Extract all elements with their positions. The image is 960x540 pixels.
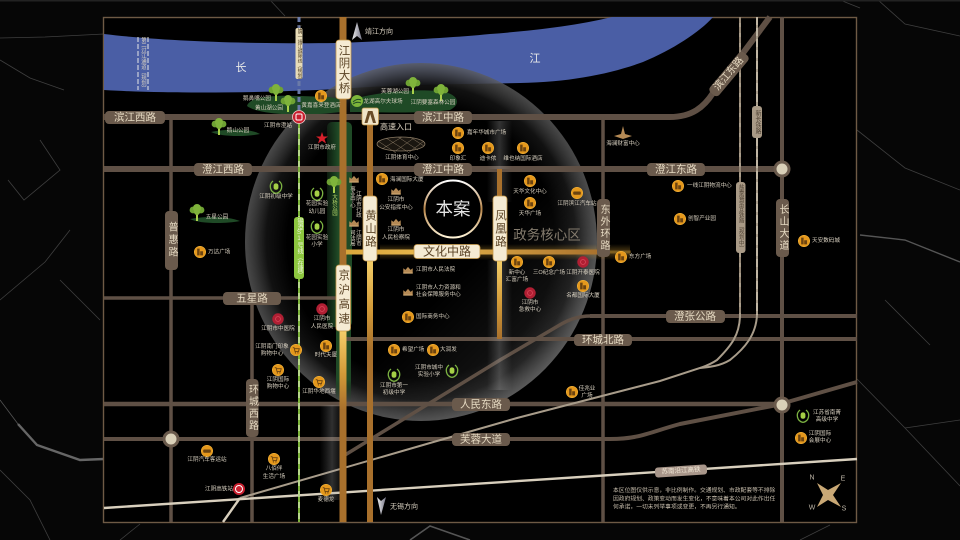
road label: 芙蓉大道	[452, 432, 510, 446]
compass: S	[842, 506, 847, 512]
park: 芙蓉湖公园	[381, 77, 420, 95]
gov: 江阴市行政事业中心: 事业中心	[349, 185, 356, 208]
school: 花园实验幼儿园: 花园实验	[306, 199, 329, 207]
gov: 江阴市人民检察院: 江阴市	[388, 225, 405, 233]
gov: 江阴市行政事业中心	[349, 176, 362, 219]
road label: 人民东路	[452, 398, 510, 411]
district label: 政务核心区	[513, 228, 581, 242]
mall: 江阴国际购物中心: 购物中心	[267, 382, 290, 390]
POI: 天安数码城	[798, 235, 840, 247]
riverside green belts	[190, 90, 457, 223]
POI: 迪卡侬	[480, 142, 497, 162]
POI: 嘉年华城市广场	[452, 127, 507, 139]
POI: 名都国际大厦	[566, 280, 600, 299]
road label: 环城西路: 环城西路	[246, 384, 258, 432]
POI: 江阴滨江汽车站: 江阴滨江汽车站	[557, 199, 597, 207]
POI: 佳兆业广场	[566, 384, 596, 399]
road label: 环城北路	[574, 333, 632, 346]
POI: 海澜国际大厦: 海澜国际大厦	[390, 175, 424, 183]
project marker: 本案: 本案	[436, 199, 470, 219]
road label: 普惠路	[165, 211, 178, 270]
hospital: 江阴市人民医院: 人民医院	[311, 322, 334, 330]
school: 江阴市第一初级中学	[380, 369, 408, 396]
highlighted label: 黄山路: 黄山路	[364, 209, 377, 248]
POI: 创智产业园	[674, 213, 716, 225]
hospital: 江阴市急救中心	[519, 287, 542, 313]
park: 鹅山公园: 鹅山公园	[227, 126, 250, 134]
POI: 三O纪念广场: 三O纪念广场	[533, 268, 566, 276]
school: 江阴市第一初级中学: 江阴市第一	[380, 381, 408, 389]
metro line S1	[294, 17, 304, 522]
direction arrow: 靖江方向	[352, 22, 393, 40]
POI: 万达广场: 万达广场	[208, 248, 231, 256]
school: 江阴市城中实验小学: 实验小学	[418, 370, 441, 378]
park: 鹅鼻嘴公园: 鹅鼻嘴公园	[243, 94, 271, 102]
highlighted label: 京沪高速: 京沪高速	[337, 268, 350, 327]
gov: 江阴市行政事业中心: 江阴市行政	[355, 190, 362, 219]
POI: 江阴汽车客运站: 江阴汽车客运站	[187, 455, 227, 463]
park: 江阴要塞森林公园: 江阴要塞森林公园	[411, 98, 456, 106]
compass: W	[809, 504, 816, 512]
POI: 维也纳国际酒店	[503, 142, 543, 162]
light glows along roads	[320, 121, 630, 500]
POI: 新中心汇富广场: 新中心	[509, 268, 526, 276]
road network	[104, 17, 857, 522]
school: 江阴市第一初级中学: 初级中学	[383, 388, 406, 396]
POI: 佳兆业广场: 广场	[581, 391, 593, 399]
highlighted label: 江阴大桥	[336, 40, 351, 99]
POI: 万达广场	[194, 246, 231, 258]
rail label: 盐泰锡常宜铁路: 盐泰锡常宜铁路（规划中）	[738, 183, 744, 251]
metro line S1: 锡澄S1号线（在建）	[296, 217, 303, 278]
POI: 印象汇: 印象汇	[450, 154, 467, 162]
disclaimer note: 因政府规划、政策变动而发生变化，不意味着本公司对此作出任	[613, 494, 776, 502]
highlighted label: 文化中路	[414, 244, 480, 258]
mall: 江阴南门印象购物中心: 江阴南门印象	[255, 342, 289, 350]
school: 江阴初级中学	[259, 181, 293, 200]
station: 江阴高铁站: 江阴高铁站	[205, 484, 233, 492]
hospital: 江阴市人民医院: 江阴市	[314, 314, 331, 322]
mall: 八佰伴生活广场	[263, 453, 286, 480]
highlighted label: 江阴大桥: 江阴大桥	[338, 44, 350, 94]
POI: 天华文化中心: 天华文化中心	[513, 187, 547, 195]
gov: 江阴市司法局	[349, 220, 362, 247]
school: 江苏省南菁高级中学	[797, 408, 841, 423]
POI: 三O纪念广场	[533, 256, 566, 276]
POI: 大润发: 大润发	[440, 345, 457, 353]
hospital: 江阴市急救中心: 急救中心	[519, 305, 542, 313]
second river crossing (planned): 第二过江通道（规划）	[140, 36, 147, 91]
direction arrow: 无锡方向	[377, 497, 418, 515]
direction arrow: 无锡方向: 无锡方向	[390, 502, 418, 510]
highlighted label: 文化中路: 文化中路	[423, 244, 471, 258]
railway lines	[104, 17, 857, 522]
school: 江阴初级中学: 江阴初级中学	[259, 192, 293, 200]
POI: 印象汇	[450, 142, 467, 162]
highlighted label: 凤凰路	[493, 196, 507, 261]
disclaimer note	[613, 486, 776, 510]
hospital: 江阴市急救中心: 江阴市	[522, 298, 539, 306]
gov: 江阴市人力资源和社会保障服务中心	[403, 283, 461, 298]
road label: 滨江西路	[105, 110, 165, 124]
hotel: 黄嘉喜来登酒店	[301, 90, 341, 109]
mall: 八佰伴生活广场: 八佰伴	[266, 464, 283, 472]
road label: 芙蓉大道: 芙蓉大道	[460, 432, 502, 446]
school: 花园实验幼儿园	[306, 188, 329, 215]
POI: 天安数码城: 天安数码城	[812, 236, 840, 244]
school: 花园实验小学: 小学	[311, 240, 323, 248]
school: 花园实验小学	[306, 221, 329, 248]
highlighted label: 黄山路	[363, 196, 377, 261]
hotel: 黄嘉喜来登酒店: 黄嘉喜来登酒店	[301, 101, 341, 109]
road label: 苏南沿江高铁	[655, 464, 707, 478]
mall: 麦德龙	[318, 484, 335, 503]
highway entrance icon	[362, 108, 378, 125]
gov: 江阴市人民法院	[403, 265, 456, 274]
gov: 江阴市公安指挥中心: 公安指挥中心	[379, 203, 413, 211]
POI: 天华文化中心	[513, 175, 547, 195]
road label: 五星路: 五星路	[236, 292, 268, 304]
POI: 时代天厦	[315, 340, 338, 358]
hospital: 江阴市中医院	[261, 313, 295, 332]
compass: N	[809, 474, 815, 482]
gov: 江阴市司法局: 司法局	[349, 230, 356, 247]
POI: 名都国际大厦: 名都国际大厦	[566, 291, 600, 299]
metro line S1: 江阴一靖江城际线（规划）	[296, 24, 302, 82]
highway entrance text: 高速入口	[380, 122, 412, 132]
POI: 天华广场	[519, 197, 542, 217]
mall: 麦德龙: 麦德龙	[318, 495, 335, 503]
POI: 江阴国际会展中心: 会展中心	[809, 436, 832, 444]
gov: 江阴市公安指挥中心	[379, 188, 413, 211]
direction arrow: 靖江方向: 靖江方向	[365, 26, 393, 36]
government: 江阴市政府	[308, 132, 336, 151]
mall: 江阴国际购物中心: 江阴国际	[267, 375, 290, 383]
POI: 希望广场: 希望广场	[402, 345, 425, 353]
road label: 澄张公路	[666, 310, 725, 323]
gov: 江阴市人民法院: 江阴市人民法院	[416, 265, 456, 273]
gov: 江阴市人力资源和社会保障服务中心: 社会保障服务中心	[416, 290, 461, 298]
POI: 国际商务中心	[402, 311, 450, 323]
POI: 江阴汽车客运站	[187, 445, 227, 463]
road label: 澄江西路: 澄江西路	[202, 162, 244, 176]
stadium: 江阴体育中心: 江阴体育中心	[385, 153, 419, 161]
road label: 苏南沿江高铁: 苏南沿江高铁	[661, 464, 701, 476]
school: 花园实验小学: 花园实验	[306, 233, 329, 241]
mall: 江阴华地西堰	[302, 376, 336, 395]
school: 花园实验幼儿园: 幼儿园	[309, 207, 326, 215]
POI: 国际商务中心: 国际商务中心	[416, 312, 450, 320]
POI: 海澜财富中心: 海澜财富中心	[606, 139, 640, 147]
mall: 江阴南门印象购物中心	[255, 342, 302, 357]
park: 大桥公园: 大桥公园	[331, 193, 338, 217]
highlighted label: 凤凰路: 凤凰路	[494, 210, 507, 248]
POI: 创智产业园: 创智产业园	[688, 214, 716, 222]
gov: 江阴市人民检察院	[382, 219, 410, 241]
compass: E	[841, 476, 846, 482]
school: 江阴市城中实验小学	[415, 363, 458, 378]
park: 鹅鼻嘴公园	[243, 84, 283, 102]
POI: 时代天厦: 时代天厦	[315, 350, 338, 358]
rail label: 新长铁路	[752, 106, 762, 138]
POI: 嘉年华城市广场: 嘉年华城市广场	[467, 128, 507, 136]
POI: 江阴滨江汽车站	[557, 187, 597, 207]
POI: 维也纳国际酒店: 维也纳国际酒店	[503, 154, 543, 162]
POI: 新中心汇富广场: 汇富广场	[506, 275, 529, 283]
gov: 江阴市人力资源和社会保障服务中心: 江阴市人力资源和	[416, 283, 461, 291]
POI: 天华广场: 天华广场	[519, 209, 542, 217]
road label: 澄江西路	[194, 162, 252, 176]
road label: 环城北路: 环城北路	[582, 333, 624, 346]
road label: 普惠路: 普惠路	[166, 221, 178, 259]
gold expressway roads	[340, 17, 631, 522]
mall: 江阴华地西堰: 江阴华地西堰	[302, 387, 336, 395]
road label: 人民东路: 人民东路	[460, 398, 502, 410]
park: 五星公园: 五星公园	[206, 214, 229, 220]
road label: 滨江中路: 滨江中路	[422, 110, 464, 124]
road label: 东外环路: 东外环路	[598, 203, 610, 252]
park: 芙蓉湖公园: 芙蓉湖公园	[381, 87, 409, 95]
hospital: 江阴市人民医院	[311, 303, 334, 330]
hospital: 江阴市中医院: 江阴市中医院	[261, 324, 295, 332]
stadium: 江阴体育中心	[377, 137, 425, 161]
POI: 一线江阴物流中心	[672, 180, 732, 192]
school: 江苏省南菁高级中学: 高级中学	[816, 415, 839, 423]
disclaimer note: 本区位图仅供示意，非比例制作。交通规划、市政配套等不排除	[613, 486, 776, 494]
disclaimer note: 何承诺，一切未列举事项或变更，不再另行通知。	[613, 502, 741, 510]
road label: 滨江东路	[707, 49, 750, 98]
government: 江阴市政府: 江阴市政府	[308, 143, 336, 151]
POI: 大润发	[427, 344, 457, 356]
POI: 一线江阴物流中心: 一线江阴物流中心	[687, 181, 732, 189]
road label: 澄江东路: 澄江东路	[655, 162, 697, 176]
rail label: 盐泰锡常宜铁路	[736, 182, 746, 253]
metro station	[264, 110, 306, 129]
road label: 滨江东路: 滨江东路	[710, 54, 746, 93]
gov: 江阴市司法局: 江阴市	[355, 230, 362, 247]
POI: 海澜财富中心	[606, 126, 640, 147]
POI: 新中心汇富广场	[506, 256, 529, 283]
POI: 海澜国际大厦	[376, 173, 424, 185]
POI: 江阴国际会展中心	[795, 429, 832, 444]
hospital: 江阴开泰医院: 江阴开泰医院	[566, 268, 600, 276]
POI: 迪卡侬: 迪卡侬	[480, 154, 497, 162]
compass	[809, 474, 847, 512]
gov: 江阴市公安指挥中心: 江阴市	[388, 195, 405, 203]
school: 江苏省南菁高级中学: 江苏省南菁	[813, 408, 841, 416]
road label: 澄张公路: 澄张公路	[674, 310, 716, 322]
road nodes	[162, 160, 790, 448]
rail label: 新长铁路: 新长铁路	[754, 109, 761, 135]
river: Yangtze: 长	[236, 61, 246, 74]
project marker: 本案	[424, 180, 482, 238]
road label: 长山大道: 长山大道	[777, 204, 789, 252]
park: 五星公园	[190, 204, 229, 221]
road label: 滨江中路	[414, 110, 472, 124]
school: 江阴市城中实验小学: 江阴市城中	[415, 363, 443, 371]
road label: 滨江西路: 滨江西路	[114, 110, 156, 124]
park: 鹅山公园	[212, 118, 250, 135]
POI: 希望广场	[388, 344, 425, 356]
road label: 澄江东路	[647, 162, 705, 176]
park: 江阴要塞森林公园	[411, 84, 456, 106]
golf: 龙湖高尔夫球场: 龙湖高尔夫球场	[363, 97, 403, 105]
golf: 龙湖高尔夫球场	[351, 95, 403, 107]
park: 黄山湖公园: 黄山湖公园	[255, 104, 283, 112]
green corridor along expressway	[327, 122, 352, 402]
central glowing circle	[245, 63, 597, 421]
gov: 江阴市人民检察院: 人民检察院	[382, 233, 410, 241]
second river crossing (planned)	[138, 36, 148, 91]
POI: 东方广场	[615, 251, 652, 263]
road label: 澄江中路: 澄江中路	[422, 162, 464, 176]
mall: 江阴南门印象购物中心: 购物中心	[261, 349, 284, 357]
road label: 五星路	[223, 292, 281, 305]
metro station: 江阴市澄站	[264, 121, 292, 129]
park: 大桥公园	[327, 176, 341, 217]
map panel frame	[104, 18, 856, 522]
POI: 佳兆业广场: 佳兆业	[579, 384, 596, 392]
mall: 江阴国际购物中心	[267, 364, 290, 390]
park: 黄山湖公园	[255, 95, 295, 112]
mall: 八佰伴生活广场: 生活广场	[263, 472, 286, 480]
hospital: 江阴开泰医院	[566, 256, 600, 276]
river: Yangtze: 江	[530, 52, 540, 65]
river: Yangtze	[104, 17, 713, 93]
POI: 东方广场: 东方广场	[629, 252, 652, 260]
POI: 江阴国际会展中心: 江阴国际	[809, 429, 832, 437]
station: 江阴高铁站	[205, 483, 245, 495]
road label: 澄江中路	[414, 162, 472, 176]
